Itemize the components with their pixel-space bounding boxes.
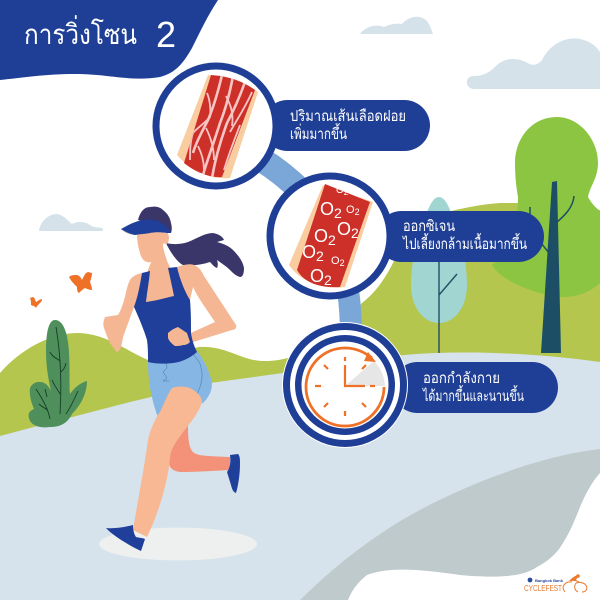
circle: muscle capillaries	[156, 66, 276, 186]
oxygen labels: 2	[316, 248, 324, 264]
front leg	[133, 386, 202, 537]
cloud: left	[39, 214, 103, 231]
logo: Bangkok Bank Cyclefest: Bangkok Bank	[535, 578, 564, 583]
oxygen labels: O	[302, 242, 316, 262]
oxygen labels: 2	[328, 232, 336, 248]
shadow	[99, 528, 257, 560]
pill: exercise: ออกกำลังกาย	[423, 370, 500, 387]
pill: oxygen	[376, 211, 544, 262]
right arm	[177, 264, 236, 343]
right hand	[168, 327, 190, 346]
icon: muscle tissue	[177, 75, 258, 178]
header banner	[0, 0, 218, 80]
back leg	[169, 420, 230, 472]
oxygen labels: 2	[355, 207, 360, 217]
oxygen labels: 2	[334, 205, 342, 221]
front shoe	[106, 525, 145, 551]
oxygen labels: O	[310, 266, 324, 286]
head	[137, 231, 164, 262]
oxygen labels: 2	[324, 272, 332, 288]
left arm	[103, 273, 146, 352]
hills	[0, 203, 600, 450]
oxygen labels: O	[336, 185, 344, 196]
connector: circle 2 to 3	[348, 290, 351, 335]
oxygen labels: 2	[344, 188, 349, 197]
oxygen labels: O	[331, 255, 340, 267]
icon: blood vessel	[289, 185, 373, 288]
bush	[29, 320, 87, 427]
oxygen labels: O	[337, 219, 351, 239]
pill: exercise: ได้มากขึ้นและนานขึ้น	[422, 385, 524, 405]
road shadow	[300, 449, 600, 600]
hair	[138, 207, 172, 233]
pill: capillaries	[262, 100, 430, 151]
butterfly: small	[30, 297, 42, 308]
oxygen labels: O	[314, 226, 328, 246]
neck and chest	[146, 240, 178, 304]
logo: Bangkok Bank Cyclefest: CYCLEFEST	[524, 584, 562, 593]
tank top	[134, 267, 197, 364]
circle: clock	[282, 322, 408, 448]
icon: clock	[306, 348, 385, 426]
cloud: top centre	[360, 17, 433, 34]
title: การวิ่งโซน	[24, 15, 137, 50]
runner	[99, 207, 257, 560]
oxygen labels: 2	[351, 225, 359, 241]
pill: exercise	[392, 362, 558, 413]
visor	[121, 220, 171, 235]
ponytail	[166, 233, 244, 277]
tree: light green canopy	[492, 117, 600, 297]
tree: teal leaf	[411, 197, 467, 353]
pill: capillaries: เพิ่มมากขึ้น	[290, 123, 347, 143]
zone number: 2	[156, 14, 176, 55]
butterfly: large	[69, 272, 92, 293]
circle: oxygen	[270, 176, 390, 296]
connector: circle 1 to 2	[262, 160, 302, 192]
pill: oxygen: ออกซิเจน	[403, 218, 455, 235]
ear	[163, 232, 169, 244]
logo: Bangkok Bank Cyclefest	[524, 574, 587, 593]
cloud: top right	[467, 38, 600, 89]
shorts	[148, 351, 212, 417]
pill: capillaries: ปริมาณเส้นเลือดฝอย	[290, 108, 406, 125]
pill: oxygen: ไปเลี้ยงกล้ามเนื้อมากขึ้น	[402, 233, 527, 253]
back shoe	[227, 454, 240, 493]
oxygen labels	[302, 185, 360, 288]
road	[0, 353, 600, 600]
oxygen labels: O	[346, 204, 355, 216]
oxygen labels: O	[320, 199, 334, 219]
oxygen labels: 2	[340, 258, 345, 268]
tree: dark trunk	[530, 181, 574, 353]
